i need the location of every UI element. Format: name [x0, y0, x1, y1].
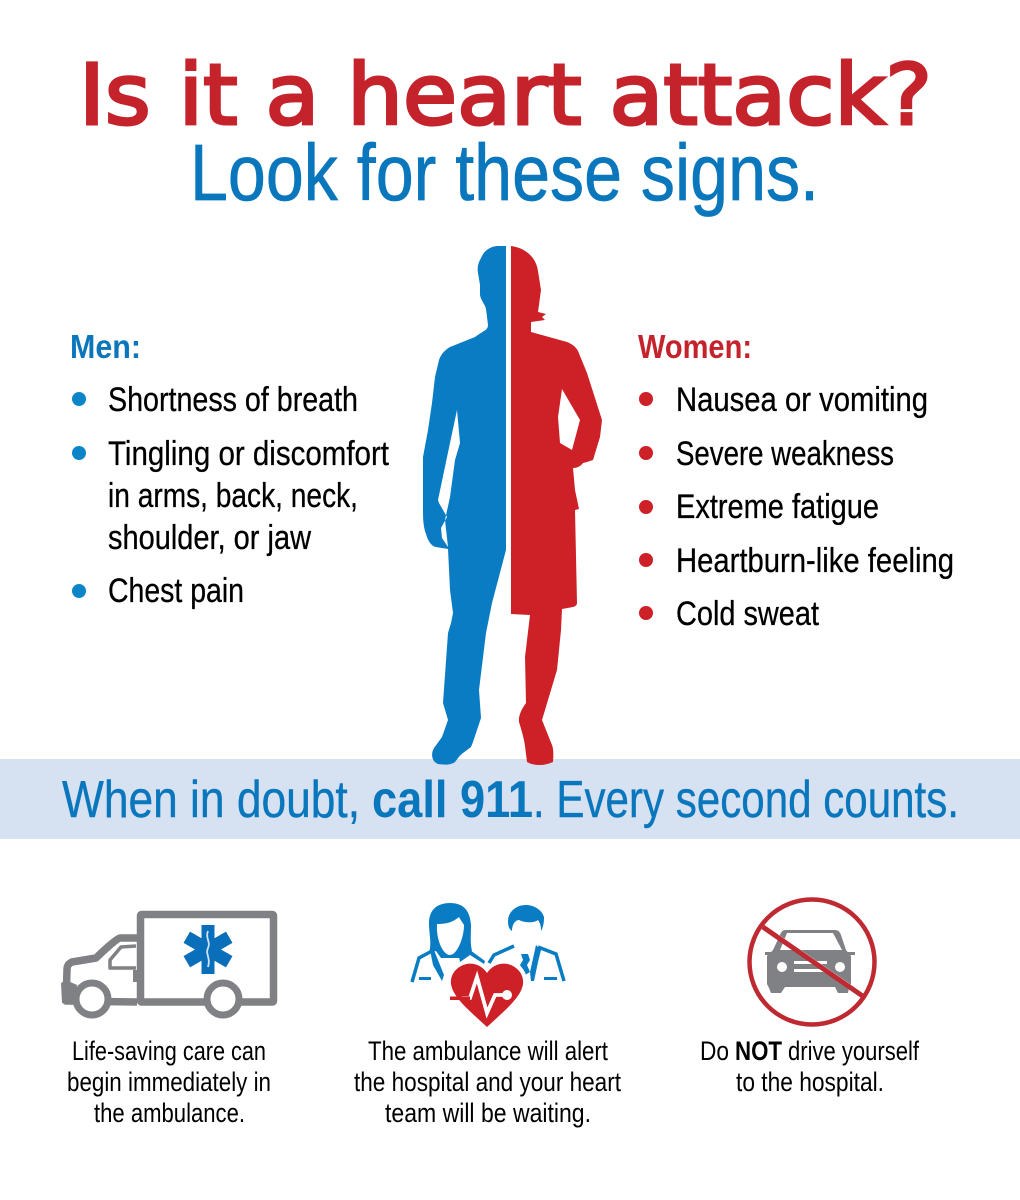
woman silhouette	[511, 246, 602, 765]
caption: do not drive	[700, 1036, 919, 1097]
list: women's symptoms: Cold sweat	[676, 595, 819, 633]
list: women's symptoms	[639, 381, 954, 633]
caption: hospital alert: The ambulance will alert	[368, 1036, 608, 1066]
list: men's symptoms: Shortness of breath	[108, 381, 358, 419]
man silhouette	[423, 246, 506, 765]
call to action band	[0, 759, 1020, 839]
icon: star of life	[184, 925, 232, 974]
list: men's symptoms: Tingling or discomfort	[108, 435, 389, 473]
caption: hospital alert: team will be waiting.	[385, 1098, 591, 1128]
list: men's symptoms: Chest pain	[108, 572, 244, 610]
caption: do not drive: to the hospital.	[736, 1067, 884, 1097]
ambulance wheels	[76, 983, 108, 1015]
ambulance window	[110, 946, 136, 968]
car	[765, 930, 855, 993]
icon: ambulance	[61, 914, 274, 1015]
prohibition sign	[750, 900, 874, 1024]
heading: men: Men:	[70, 328, 141, 365]
title: Is it a heart attack?	[79, 46, 932, 144]
list: women's symptoms: Severe weakness	[676, 435, 894, 473]
woman doctor	[412, 903, 485, 982]
caption: ambulance care: the ambulance.	[94, 1098, 245, 1128]
caption: hospital alert	[354, 1036, 621, 1128]
caption: ambulance care: Life-saving care can	[72, 1036, 266, 1066]
title: Look for these signs.	[190, 128, 819, 217]
caption: ambulance care: begin immediately in	[67, 1067, 271, 1097]
call to action band: call 911	[372, 771, 533, 829]
caption: ambulance care	[67, 1036, 271, 1128]
heart with pulse line	[447, 960, 527, 1032]
heading: women: Women:	[638, 328, 752, 365]
panel: men's symptoms	[70, 328, 389, 610]
caption: do not drive: Do	[700, 1036, 729, 1066]
ambulance cab	[66, 938, 137, 1002]
list: women's symptoms: Nausea or vomiting	[676, 381, 928, 419]
man doctor	[489, 905, 564, 981]
list: men's symptoms	[72, 381, 389, 610]
ambulance box	[140, 914, 274, 1002]
list: men's symptoms: shoulder, or jaw	[108, 519, 311, 557]
panel: women's symptoms	[638, 328, 954, 633]
figure: half man, half woman silhouette	[423, 246, 602, 765]
list: women's symptoms: Extreme fatigue	[676, 488, 879, 526]
list: men's symptoms: in arms, back, neck,	[108, 477, 358, 515]
title	[79, 46, 932, 217]
caption: do not drive: drive yourself	[788, 1036, 919, 1066]
caption: hospital alert: the hospital and your heart	[354, 1067, 621, 1097]
list: women's symptoms: Heartburn-like feeling	[676, 542, 954, 580]
icon: doctors and heart	[412, 903, 564, 1032]
caption: do not drive: NOT	[735, 1036, 782, 1066]
icon: no driving	[750, 900, 874, 1024]
call to action band: When in doubt,	[62, 771, 360, 829]
